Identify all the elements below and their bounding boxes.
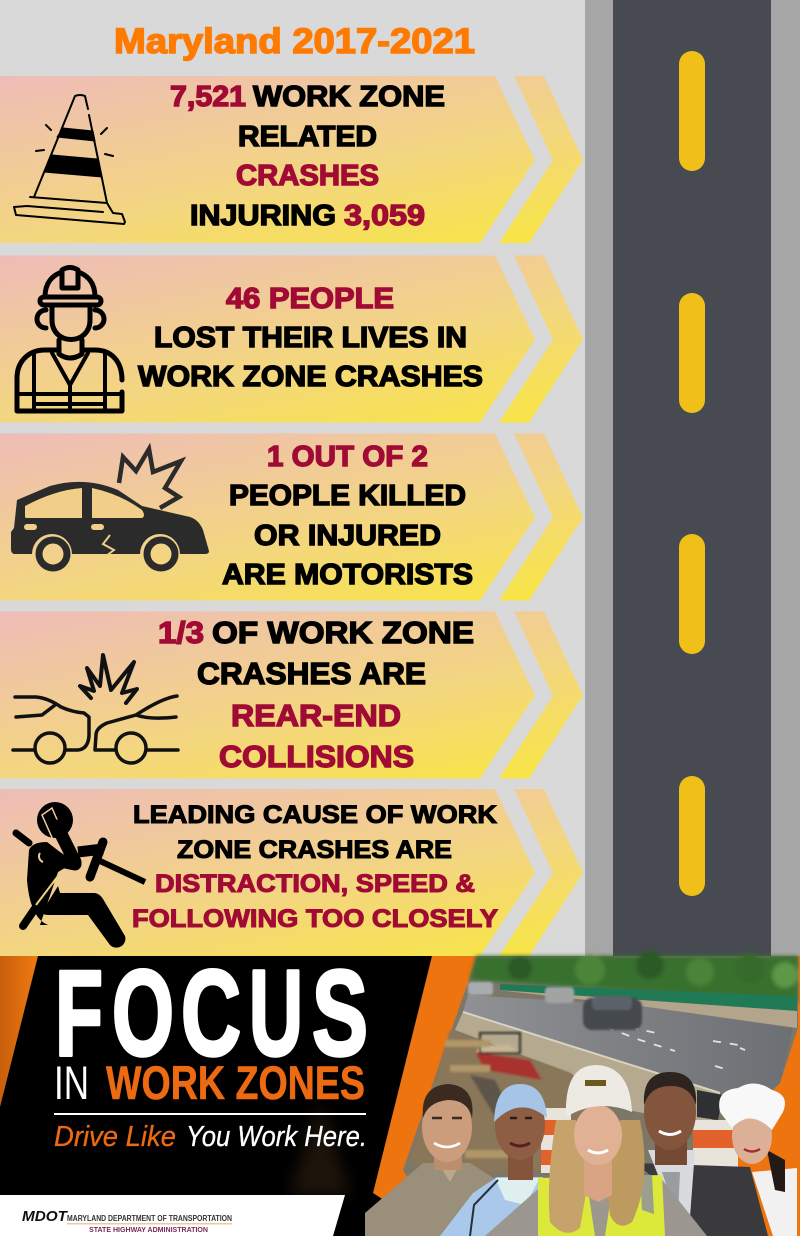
logo: MDOT: MARYLAND DEPARTMENT OF TRANSPORTATION (67, 1214, 232, 1223)
text: leading causes: FOLLOWING TOO CLOSELY (132, 905, 498, 933)
tagline (54, 1121, 367, 1153)
chevron arrow (0, 789, 583, 956)
person: chef (719, 1083, 797, 1236)
text: motorists: 1 OUT OF 2 (267, 441, 428, 473)
lane markings (590, 1021, 745, 1069)
icon: construction worker (17, 268, 122, 411)
title: Maryland 2017-2021 (114, 22, 475, 61)
person: nurse (440, 1084, 547, 1236)
panel: leading causes (0, 789, 583, 956)
text: rear-end collisions: CRASHES ARE (197, 656, 426, 691)
banner: focus in work zones (0, 945, 800, 1236)
text: rear-end collisions: 1/3 (158, 615, 204, 650)
person: man in suit (635, 1072, 768, 1236)
icon: rear-end collision (13, 655, 178, 763)
logo: MDOT: STATE HIGHWAY ADMINISTRATION (89, 1225, 208, 1234)
heading: FOCUS: F (55, 945, 103, 1081)
text: crash stats: 7,521 (170, 81, 246, 113)
construction materials (410, 1030, 600, 1175)
text: crash stats: WORK ZONE (253, 81, 445, 113)
text: fatalities: WORK ZONE CRASHES (138, 361, 483, 393)
text: motorists (222, 441, 473, 591)
panel: fatalities (0, 256, 583, 422)
heading: FOCUS: S (312, 945, 368, 1081)
text: rear-end collisions: OF WORK ZONE (212, 615, 474, 650)
green fence (500, 984, 797, 1011)
near barrier (455, 1012, 720, 1125)
text: leading causes (132, 801, 498, 933)
text: fatalities: 46 PEOPLE (226, 283, 394, 315)
icon: crashed car (11, 449, 209, 568)
text: fatalities: LOST THEIR LIVES IN (154, 322, 467, 354)
panel: crashes (0, 76, 583, 243)
moving cars (468, 982, 642, 1030)
text: leading causes: ZONE CRASHES ARE (177, 836, 452, 864)
text: rear-end collisions: REAR-END (231, 698, 401, 733)
heading: FOCUS: U (249, 945, 303, 1081)
text: rear-end collisions (158, 615, 474, 774)
heading: FOCUS (55, 945, 368, 1081)
road (585, 0, 800, 956)
orange barrels (541, 1108, 738, 1173)
text: fatalities (138, 283, 483, 393)
text: motorists: PEOPLE KILLED (229, 480, 466, 512)
text: crash stats: CRASHES (236, 160, 379, 192)
text: crash stats: INJURING (190, 200, 336, 232)
logo: MDOT: MDOT (22, 1208, 69, 1225)
heading: FOCUS: O (112, 945, 174, 1081)
person: woman in hard hat (485, 1065, 707, 1236)
faint glow behind strip (290, 1100, 350, 1195)
trees (470, 951, 798, 1003)
text: crash stats: RELATED (238, 121, 377, 153)
tagline: Drive Like (54, 1121, 176, 1153)
heading: in work zones (54, 1056, 365, 1109)
icon: distracted driver (16, 802, 145, 948)
text: leading causes: LEADING CAUSE OF WORK (133, 801, 497, 829)
panel: motorists (0, 434, 583, 600)
text: motorists: ARE MOTORISTS (222, 559, 473, 591)
tagline: You Work Here. (186, 1121, 367, 1153)
roadway (463, 995, 793, 1100)
photo: highway work zone (365, 951, 798, 1236)
far barrier (497, 990, 797, 1028)
chevron arrow (0, 76, 583, 243)
person: soldier (365, 1084, 497, 1236)
divider line (54, 1113, 366, 1115)
heading: in work zones: IN (54, 1056, 89, 1109)
text: crash stats (170, 81, 445, 232)
right orange stripe (373, 956, 800, 1236)
icon: traffic cone (14, 95, 125, 224)
text: rear-end collisions: COLLISIONS (219, 739, 414, 774)
chevron arrow (0, 434, 583, 600)
left orange stripe (0, 956, 38, 1107)
text: motorists: OR INJURED (254, 520, 441, 552)
panel: rear-end collisions (0, 612, 583, 778)
road lane dashes (679, 51, 705, 896)
chevron arrow (0, 612, 583, 778)
chevron arrow (0, 256, 583, 422)
text: leading causes: DISTRACTION, SPEED & (155, 870, 475, 898)
white logo strip (0, 1195, 345, 1236)
logo: MDOT (22, 1208, 232, 1234)
heading: in work zones: WORK ZONES (106, 1056, 365, 1109)
heading: FOCUS: C (181, 945, 241, 1081)
text: crash stats: 3,059 (344, 200, 425, 232)
